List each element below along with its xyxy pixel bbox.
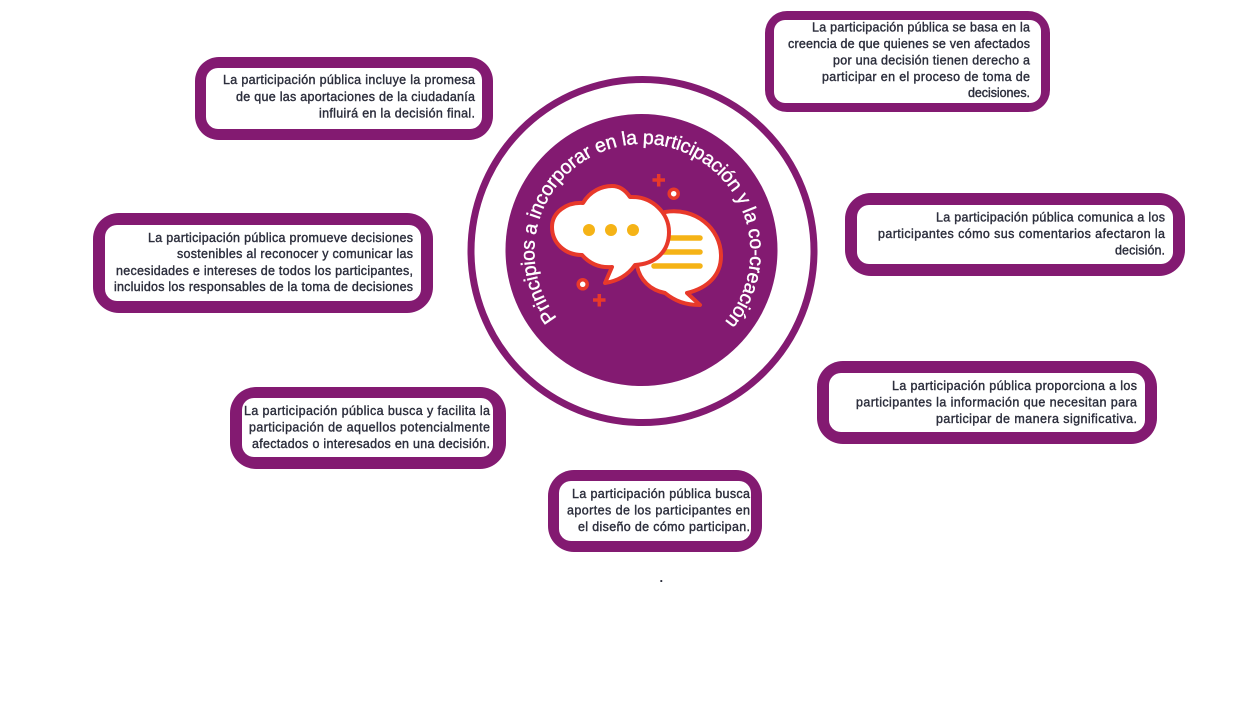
text block <box>788 20 1030 100</box>
text block: influirá en la decisión final. <box>319 106 475 120</box>
panel: callout bottom centre <box>548 470 762 552</box>
text block: decisión. <box>1115 244 1165 258</box>
text block: de que las aportaciones de la ciudadanía <box>236 90 475 104</box>
text block: participación de aquellos potencialmente <box>249 420 490 434</box>
text block: el diseño de cómo participan. <box>578 520 750 534</box>
text block: incluidos los responsables de la toma de decisiones <box>114 280 413 294</box>
text block: La participación pública se basa en la <box>812 20 1030 34</box>
panel: callout top right <box>765 11 1050 112</box>
text block: La participación pública busca <box>572 487 750 501</box>
panel: callout left middle <box>93 213 433 313</box>
inner purple disc <box>506 114 778 386</box>
text block: participantes la información que necesitan para <box>856 396 1137 410</box>
text block <box>114 231 413 294</box>
text block: participantes cómo sus comentarios afectaron la <box>878 227 1165 241</box>
text: stray period: . <box>660 570 663 585</box>
panel: callout right lower <box>817 361 1157 444</box>
text block: participar de manera significativa. <box>936 412 1137 426</box>
icon: speech bubbles <box>552 174 721 306</box>
text block: decisiones. <box>968 86 1030 100</box>
text block <box>856 379 1137 426</box>
panel: central circle badge <box>468 76 818 426</box>
text block: afectados o interesados en una decisión. <box>252 437 490 451</box>
panel: callout lower left <box>230 387 506 469</box>
text block: La participación pública comunica a los <box>936 210 1165 224</box>
text block: creencia de que quienes se ven afectados <box>788 37 1030 51</box>
text block: La participación pública busca y facilita la <box>244 404 490 418</box>
text block: necesidades e intereses de todos los participantes, <box>116 264 413 278</box>
panel: callout top left <box>195 57 493 140</box>
text block <box>244 404 490 451</box>
heading: curved title: Principios a incorporar en la participación y la co-creación <box>520 131 761 326</box>
text block: La participación pública incluye la promesa <box>223 73 475 87</box>
text block <box>878 210 1165 258</box>
text block: La participación pública proporciona a los <box>892 379 1137 393</box>
text block: aportes de los participantes en <box>567 504 750 518</box>
panel: callout right upper <box>845 193 1185 276</box>
outer ring <box>471 80 814 422</box>
text block: participar en el proceso de toma de <box>822 70 1030 84</box>
text block <box>567 487 750 534</box>
text block <box>223 73 475 120</box>
text block: por una decisión tienen derecho a <box>833 54 1030 68</box>
text block: sostenibles al reconocer y comunicar las <box>177 247 413 261</box>
text block: La participación pública promueve decisiones <box>148 231 413 245</box>
